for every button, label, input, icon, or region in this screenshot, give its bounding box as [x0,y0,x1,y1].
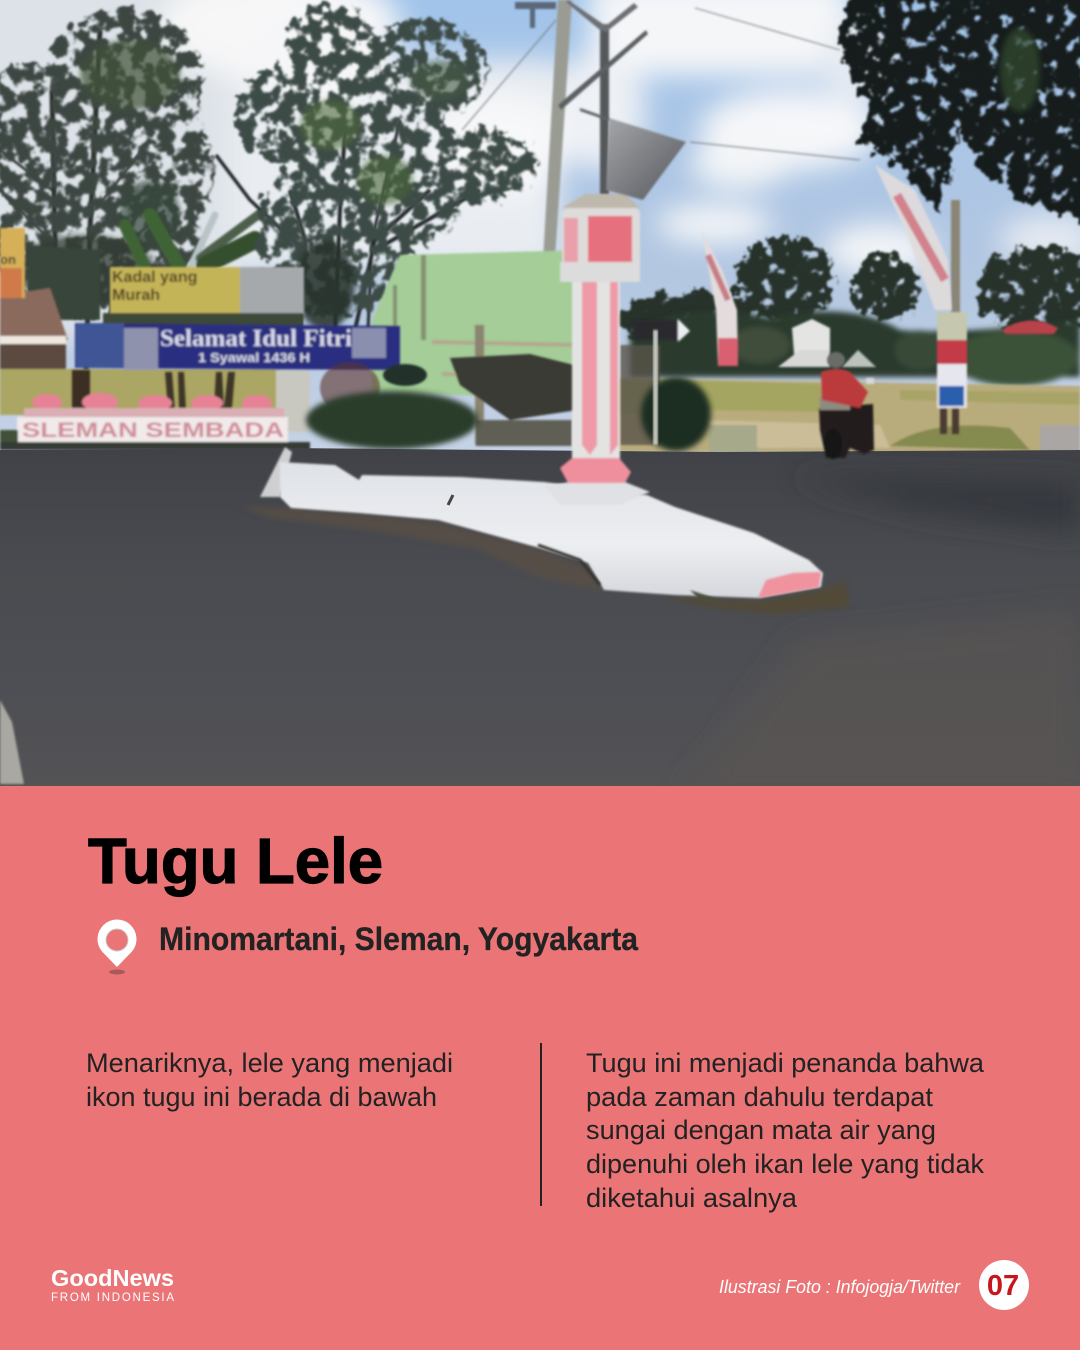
location text: Minomartani, Sleman, Yogyakarta [159,921,638,957]
field [617,378,1080,453]
panel: photo of the Tugu Lele monument [0,0,1080,786]
house in the background [778,319,1058,367]
column divider [540,1043,542,1206]
banner: Selamat Idul Fitri [75,323,400,370]
panel: text content [51,825,1029,1310]
bushes and wooden stall [306,319,711,451]
photo credit: Ilustrasi Foto : Infojogja/Twitter [719,1277,961,1297]
title: Tugu Lele [88,825,383,897]
roadside banners and kiosk [0,228,310,432]
pink and white monument column [545,108,686,505]
leafy green patch in the right tree [1000,28,1040,112]
page number badge [979,1260,1029,1310]
banner: Selamat Idul Fitri: Selamat Idul Fitri [160,326,352,352]
text block: right column: diketahui asalnya [586,1183,798,1213]
page number badge: 07 [987,1270,1019,1302]
sky [0,0,1080,460]
motorcycle and rider [819,352,874,459]
roadside banners and kiosk: Murah [112,287,160,304]
roadside banners and kiosk: on [0,252,16,267]
middle tree [216,5,540,330]
road [0,448,1080,786]
background tree line [620,236,1080,386]
text block: right column [586,1048,985,1213]
text block: right column: pada zaman dahulu terdapat [586,1082,933,1112]
left tree [0,8,215,410]
welcome planter sign: SLEMAN SEMBADA [22,419,284,442]
roadside banners and kiosk: Kadal yang [112,269,197,286]
fish monument body [260,447,823,600]
flags and posters [702,165,967,434]
text block: left column [86,1048,453,1112]
text block: right column: Tugu ini menjadi penanda bahwa [586,1048,985,1078]
green building [372,250,585,400]
icon: location pin [98,920,136,974]
welcome planter sign [0,370,310,450]
logo: GoodNews from Indonesia: GoodNews [51,1265,174,1291]
text block: left column: Menariknya, lele yang menjadi [86,1048,453,1078]
text block: left column: ikon tugu ini berada di bawah [86,1082,437,1112]
panel: text panel background [0,786,1080,1350]
curb at lower left [0,700,24,784]
top right tree [838,0,1080,225]
banner: Selamat Idul Fitri: 1 Syawal 1436 H [198,350,310,365]
logo: GoodNews from Indonesia: FROM INDONESIA [51,1292,174,1304]
road patches [680,476,1080,800]
logo: GoodNews from Indonesia [51,1265,174,1304]
banana leaves [125,212,262,268]
text block: right column: sungai dengan mata air yang [586,1115,936,1145]
poles and wires [462,0,960,365]
text block: right column: dipenuhi oleh ikan lele yang tidak [586,1149,984,1179]
dirt around the fish monument [240,506,850,614]
